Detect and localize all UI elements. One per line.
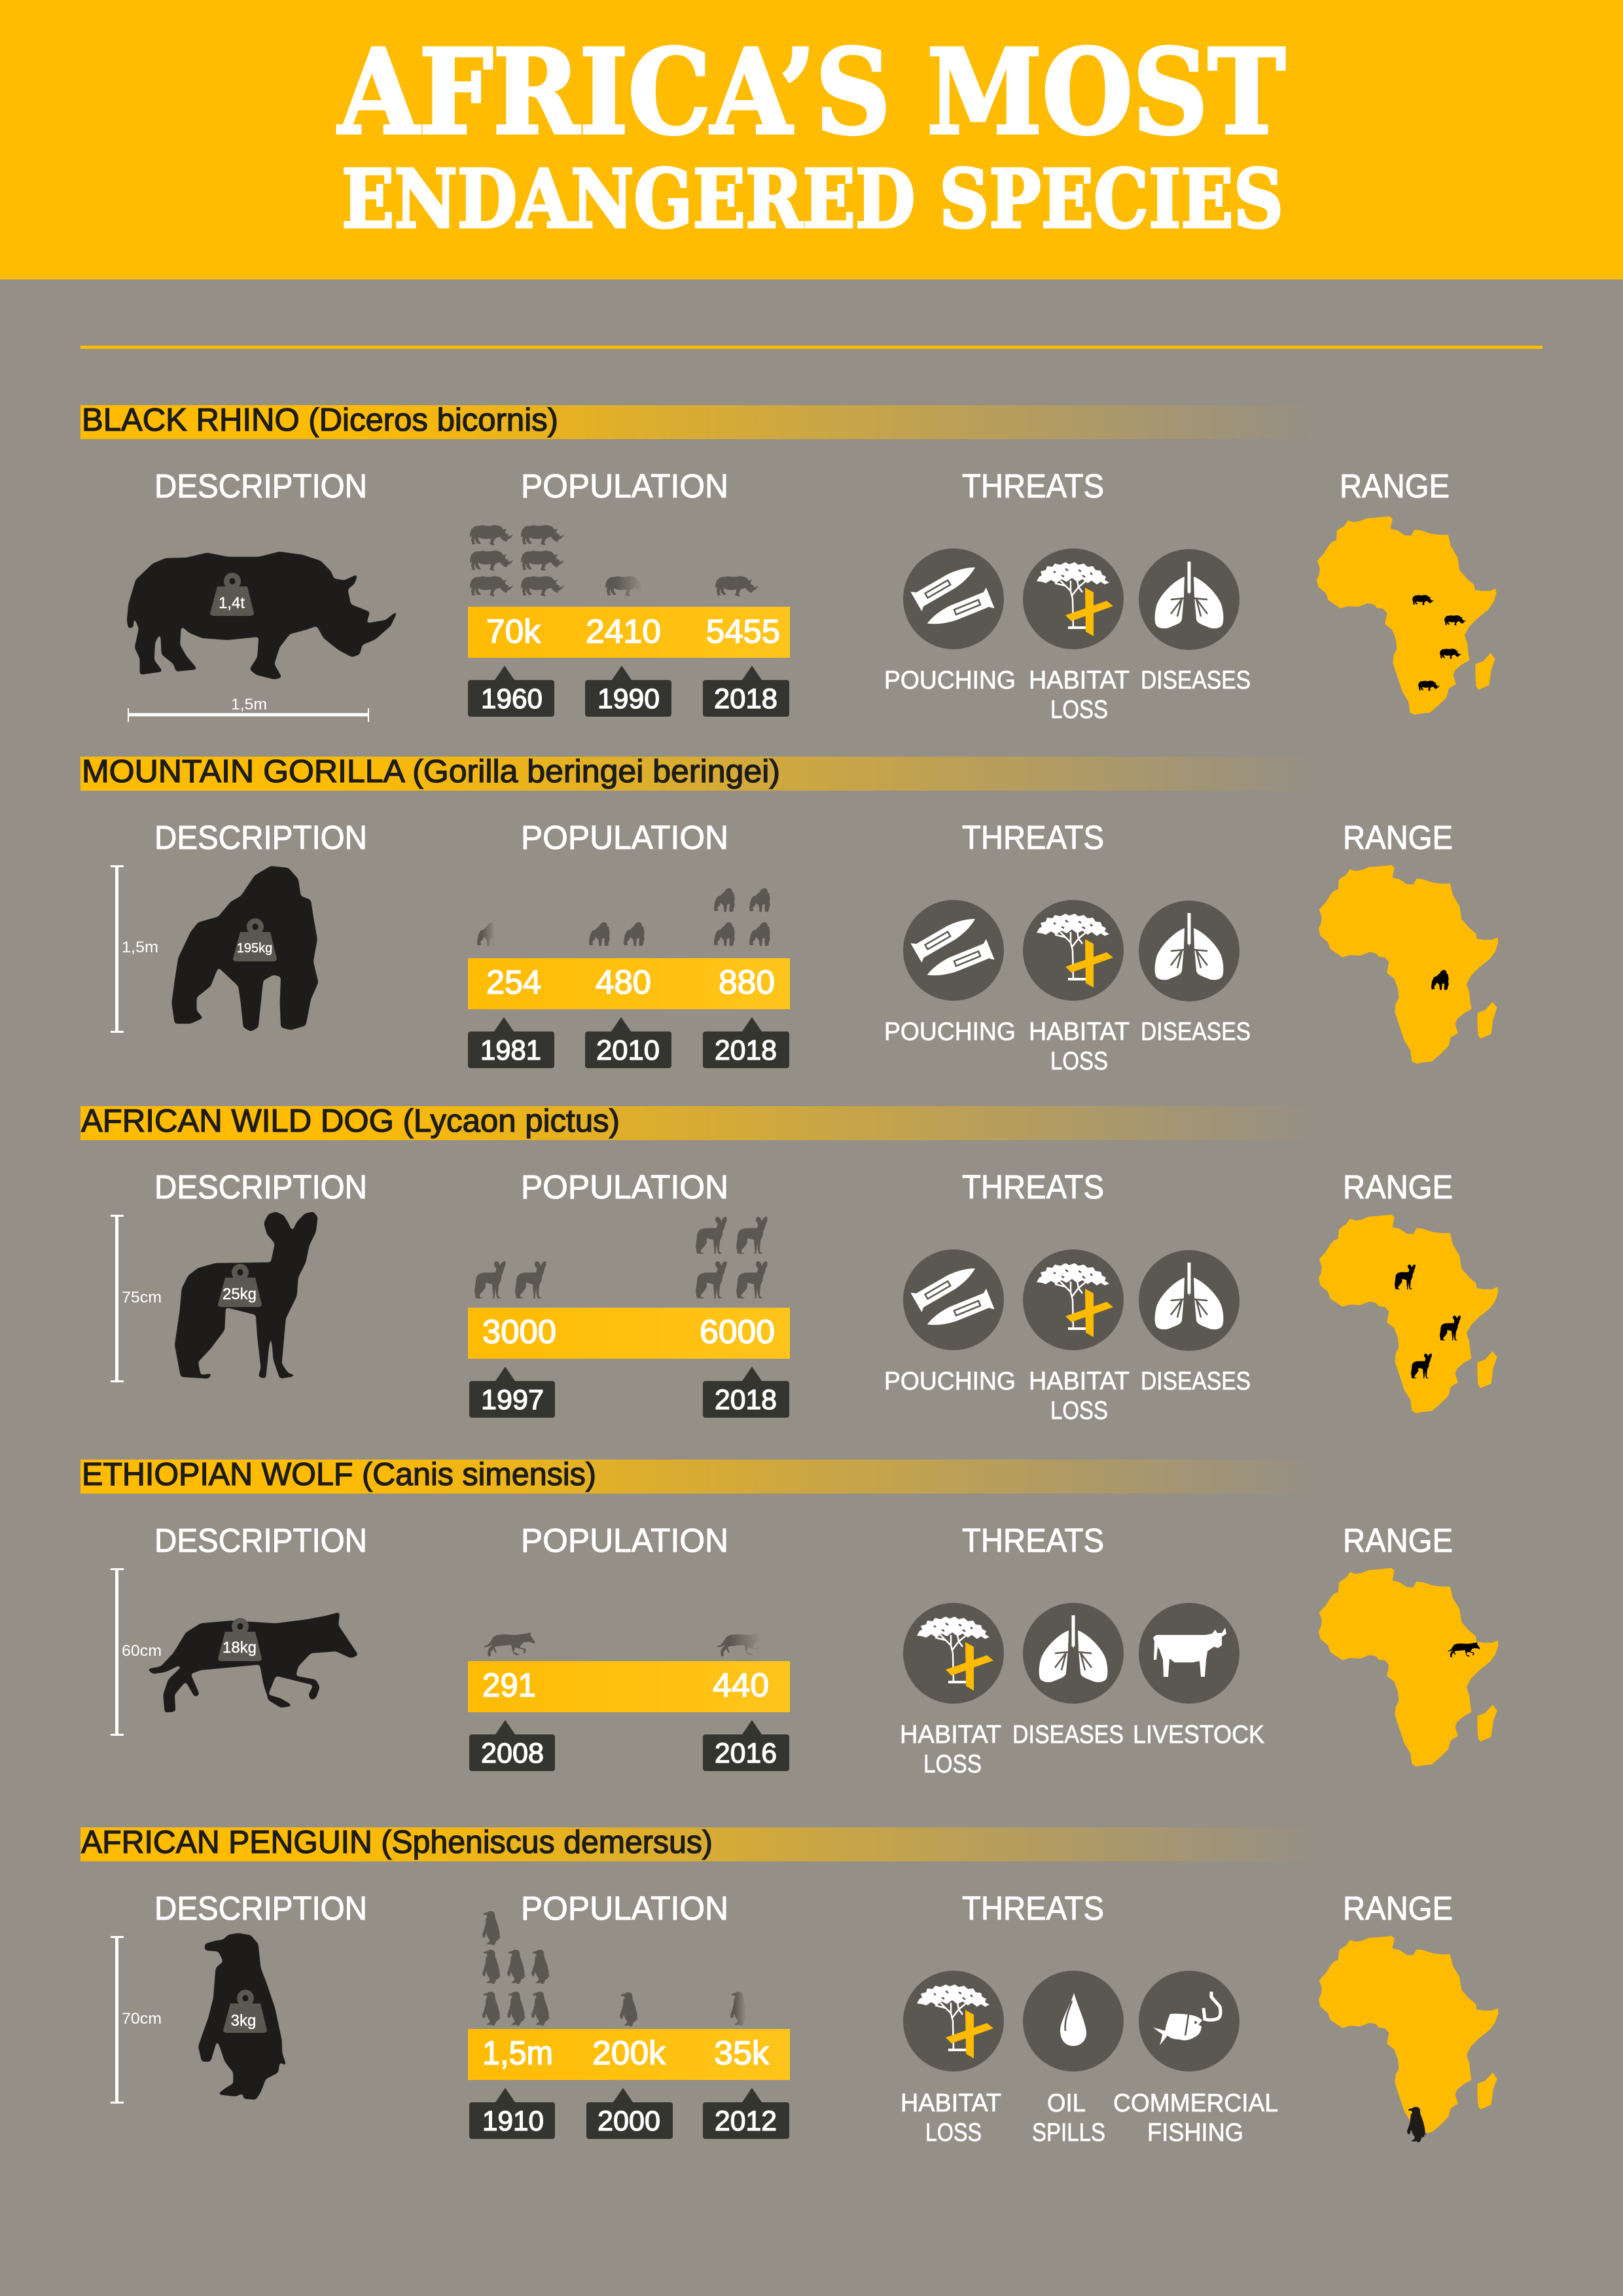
column headings (154, 467, 1450, 505)
heading bar (80, 754, 1329, 791)
panel: ethiopian wolf (80, 1457, 1498, 1778)
threats labels: COMMERCIAL (1113, 2089, 1278, 2117)
population bar: 35k (714, 2034, 770, 2072)
column headings: RANGE (1343, 1890, 1453, 1927)
column headings: POPULATION (521, 1522, 728, 1559)
year tags: 2008 (481, 1738, 544, 1769)
heading bar (80, 1103, 1329, 1140)
threats labels: LOSS (923, 1750, 982, 1778)
year tags: 2016 (715, 1738, 777, 1769)
population bar: 200k (592, 2034, 666, 2072)
heading bar (80, 403, 1329, 439)
weight (223, 1990, 267, 2033)
weight: 25kg (223, 1285, 257, 1303)
height scale: 1,5m (122, 939, 158, 956)
year tags (469, 1367, 789, 1418)
weight (233, 918, 277, 961)
weight: 18kg (223, 1639, 257, 1657)
column headings: RANGE (1340, 467, 1450, 505)
weight (218, 1264, 262, 1307)
threats labels: DISEASES (1012, 1721, 1124, 1749)
population bar: 440 (713, 1666, 769, 1704)
year tags: 1981 (480, 1035, 541, 1066)
population bar: 480 (596, 963, 651, 1001)
heading bar: AFRICAN WILD DOG (Lycaon pictus) (81, 1103, 620, 1139)
weight: 195kg (237, 941, 272, 956)
column headings: DESCRIPTION (154, 1168, 367, 1206)
column headings (154, 819, 1453, 856)
year tags: 2000 (597, 2106, 660, 2137)
threats labels: HABITAT (1029, 1018, 1130, 1046)
threats labels: SPILLS (1032, 2119, 1105, 2147)
column headings: THREATS (962, 467, 1104, 505)
column headings: THREATS (962, 1522, 1104, 1559)
column headings: DESCRIPTION (154, 1522, 367, 1559)
range map (1319, 1936, 1498, 2142)
year tags: 1997 (481, 1384, 544, 1416)
column headings: DESCRIPTION (154, 467, 367, 505)
heading bar: MOUNTAIN GORILLA (Gorilla beringei beringei) (82, 754, 780, 789)
range map (1317, 516, 1496, 715)
threats labels: HABITAT (1029, 1367, 1130, 1395)
population bar: 70k (486, 613, 541, 650)
column headings: THREATS (962, 819, 1104, 856)
column headings: POPULATION (521, 1890, 728, 1927)
title: AFRICA’S MOST (337, 24, 1285, 160)
population bar: 6000 (700, 1313, 775, 1350)
column headings: DESCRIPTION (154, 1890, 367, 1927)
divider line (80, 346, 1543, 349)
column headings: THREATS (962, 1168, 1104, 1206)
gorilla silhouette (171, 866, 318, 1031)
population bar (468, 2029, 790, 2080)
population icons (482, 1911, 749, 2026)
title: ENDANGERED SPECIES (342, 152, 1283, 247)
height scale (111, 1936, 162, 2104)
population bar: 291 (482, 1666, 536, 1704)
header band (0, 0, 1623, 279)
height scale (111, 1215, 162, 1382)
year tags (469, 2088, 789, 2139)
population bar (468, 958, 790, 1009)
population bar: 880 (719, 963, 775, 1001)
threats icons (903, 900, 1240, 1001)
threats labels (884, 666, 1251, 724)
length scale (128, 696, 369, 722)
population bar: 2410 (586, 613, 661, 650)
height scale (111, 1568, 162, 1736)
length scale: 1,5m (231, 696, 267, 713)
threats labels: OIL (1047, 2089, 1086, 2117)
height scale: 75cm (122, 1289, 162, 1306)
column headings: THREATS (962, 1890, 1104, 1927)
threats labels: POUCHING (884, 1367, 1016, 1395)
threats icons (903, 1249, 1240, 1351)
heading bar (80, 1457, 1329, 1494)
threats labels: FISHING (1147, 2119, 1243, 2147)
threats labels (900, 1721, 1264, 1778)
column headings (154, 1522, 1453, 1559)
year tags: 2018 (715, 1384, 777, 1416)
panel: mountain gorilla (80, 754, 1498, 1075)
threats labels: LOSS (925, 2119, 982, 2147)
height scale: 60cm (122, 1642, 162, 1660)
threats labels: DISEASES (1141, 666, 1251, 694)
population icons (474, 1217, 768, 1299)
threats labels: LOSS (1050, 1047, 1108, 1075)
column headings: DESCRIPTION (154, 819, 367, 856)
year tags: 2018 (715, 1035, 777, 1066)
threats icons (903, 1603, 1240, 1704)
weight (210, 573, 254, 616)
year tags (468, 1017, 789, 1068)
threats labels: HABITAT (900, 1721, 1001, 1749)
threats labels: POUCHING (884, 1018, 1016, 1046)
threats labels: DISEASES (1141, 1018, 1251, 1046)
column headings (154, 1890, 1453, 1927)
population bar (468, 607, 790, 658)
threats labels: DISEASES (1141, 1367, 1251, 1395)
year tags: 1990 (597, 683, 660, 715)
title (337, 24, 1285, 247)
population bar: 5455 (706, 613, 780, 650)
heading bar: AFRICAN PENGUIN (Spheniscus demersus) (81, 1825, 713, 1860)
population bar: 254 (486, 963, 541, 1001)
heading bar (80, 1825, 1329, 1861)
rhino silhouette (127, 552, 399, 679)
range map (1319, 1568, 1498, 1767)
population bar: 3000 (482, 1313, 556, 1350)
threats icons (903, 548, 1240, 650)
wolf silhouette (147, 1612, 359, 1713)
column headings: POPULATION (521, 819, 728, 856)
population icons (470, 525, 758, 596)
year tags (469, 1720, 789, 1771)
threats labels: LOSS (1050, 696, 1108, 724)
population bar (468, 1308, 790, 1359)
range map (1319, 1215, 1498, 1413)
threats labels (901, 2089, 1278, 2147)
column headings: RANGE (1343, 1168, 1453, 1206)
panel: african penguin (80, 1825, 1498, 2147)
column headings: RANGE (1343, 1522, 1453, 1559)
column headings: RANGE (1343, 819, 1453, 856)
year tags: 2018 (714, 683, 777, 715)
column headings: POPULATION (521, 1168, 728, 1206)
population bar: 1,5m (482, 2034, 553, 2072)
threats icons (903, 1971, 1240, 2072)
column headings (154, 1168, 1453, 1206)
panel: black rhino (80, 403, 1496, 724)
range map (1319, 865, 1498, 1064)
weight (218, 1618, 262, 1661)
population icons (477, 888, 770, 946)
threats labels: LOSS (1050, 1397, 1108, 1425)
threats labels: HABITAT (1029, 666, 1130, 694)
weight: 1,4t (219, 594, 245, 612)
year tags: 1910 (482, 2106, 544, 2137)
panel: african wild dog (80, 1103, 1498, 1425)
year tags: 1960 (481, 683, 543, 715)
population icons (484, 1632, 768, 1657)
year tags: 2010 (596, 1035, 660, 1066)
penguin silhouette (198, 1933, 287, 2100)
height scale: 70cm (122, 2010, 162, 2028)
year tags (468, 666, 789, 717)
threats labels: LIVESTOCK (1133, 1721, 1264, 1749)
population bar (468, 1661, 790, 1712)
heading bar: BLACK RHINO (Diceros bicornis) (82, 403, 558, 438)
weight: 3kg (231, 2012, 256, 2030)
height scale (111, 865, 158, 1033)
heading bar: ETHIOPIAN WOLF (Canis simensis) (82, 1457, 596, 1492)
wild dog silhouette (175, 1211, 318, 1379)
threats labels (884, 1018, 1251, 1075)
year tags: 2012 (715, 2106, 777, 2137)
threats labels: POUCHING (884, 666, 1016, 694)
threats labels (884, 1367, 1251, 1425)
column headings: POPULATION (521, 467, 728, 505)
threats labels: HABITAT (901, 2089, 1001, 2117)
